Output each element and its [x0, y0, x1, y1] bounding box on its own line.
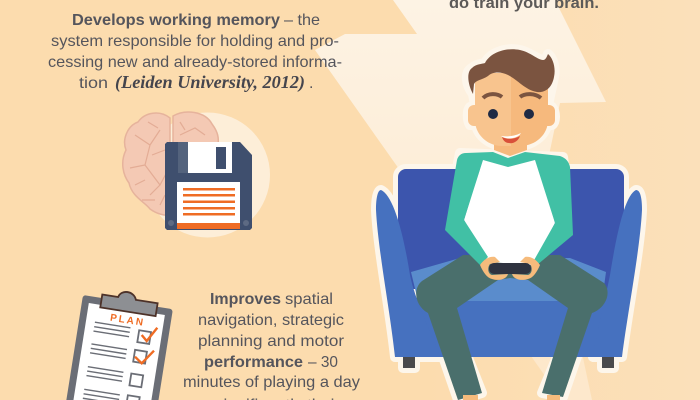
text block: working memory: tion	[79, 75, 108, 92]
shirt	[445, 152, 573, 265]
text block: working memory	[48, 12, 342, 93]
text block: working memory: cessing new and already-stored informa-	[48, 54, 342, 71]
text block: working memory: system responsible for holding and pro-	[51, 33, 339, 50]
icon: plan clipboard	[65, 285, 174, 400]
text block: spatial navigation: planning and motor	[198, 333, 345, 350]
white sticker outline	[376, 49, 642, 400]
legs	[416, 255, 608, 400]
feet	[463, 395, 560, 400]
text block: working memory: – the	[284, 12, 320, 29]
hands and controller	[480, 257, 540, 280]
text block: spatial navigation: navigation, strategic	[198, 312, 344, 329]
text block: spatial navigation	[183, 291, 360, 400]
text block: spatial navigation: – 30	[308, 354, 338, 371]
icon: plan clipboard: PLAN	[109, 313, 146, 329]
text block: spatial navigation: performance	[204, 354, 303, 371]
text block: working memory: .	[309, 75, 313, 92]
icon: brain with floppy disk	[123, 112, 270, 238]
head	[468, 49, 555, 146]
neck	[494, 138, 527, 156]
text block: spatial navigation: Improves	[210, 291, 281, 308]
text block: spatial navigation: spatial	[285, 291, 333, 308]
illustration: boy on sofa with game controller	[376, 49, 642, 400]
text block: spatial navigation: minutes of playing a day	[183, 374, 360, 391]
sofa	[376, 169, 642, 368]
text block: working memory: (Leiden University, 2012)	[115, 72, 305, 93]
text block: working memory: Develops working memory	[72, 12, 280, 29]
light beam	[315, 0, 606, 400]
